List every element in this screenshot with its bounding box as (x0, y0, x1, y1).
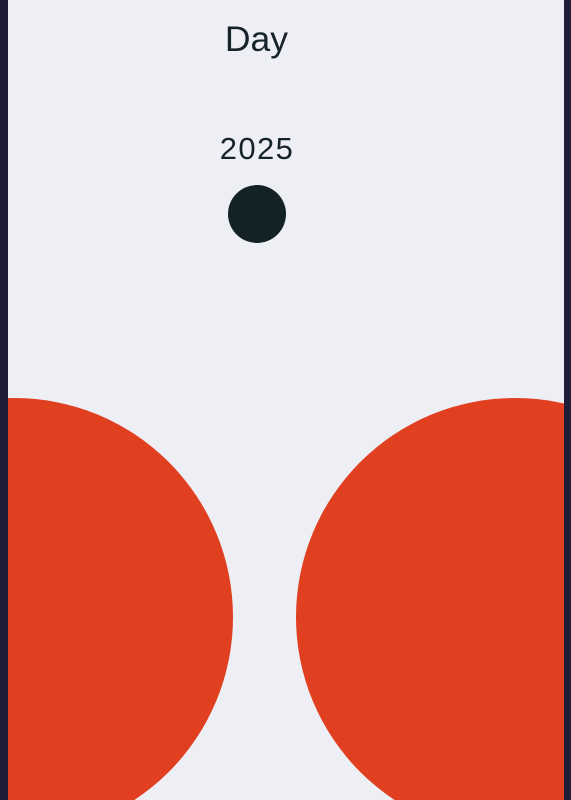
right red circle (296, 398, 571, 800)
left red circle (0, 398, 233, 800)
year: 2025: 2025 (220, 131, 294, 166)
heading: Day: Day (225, 19, 288, 59)
icon: dark circle (228, 185, 286, 243)
